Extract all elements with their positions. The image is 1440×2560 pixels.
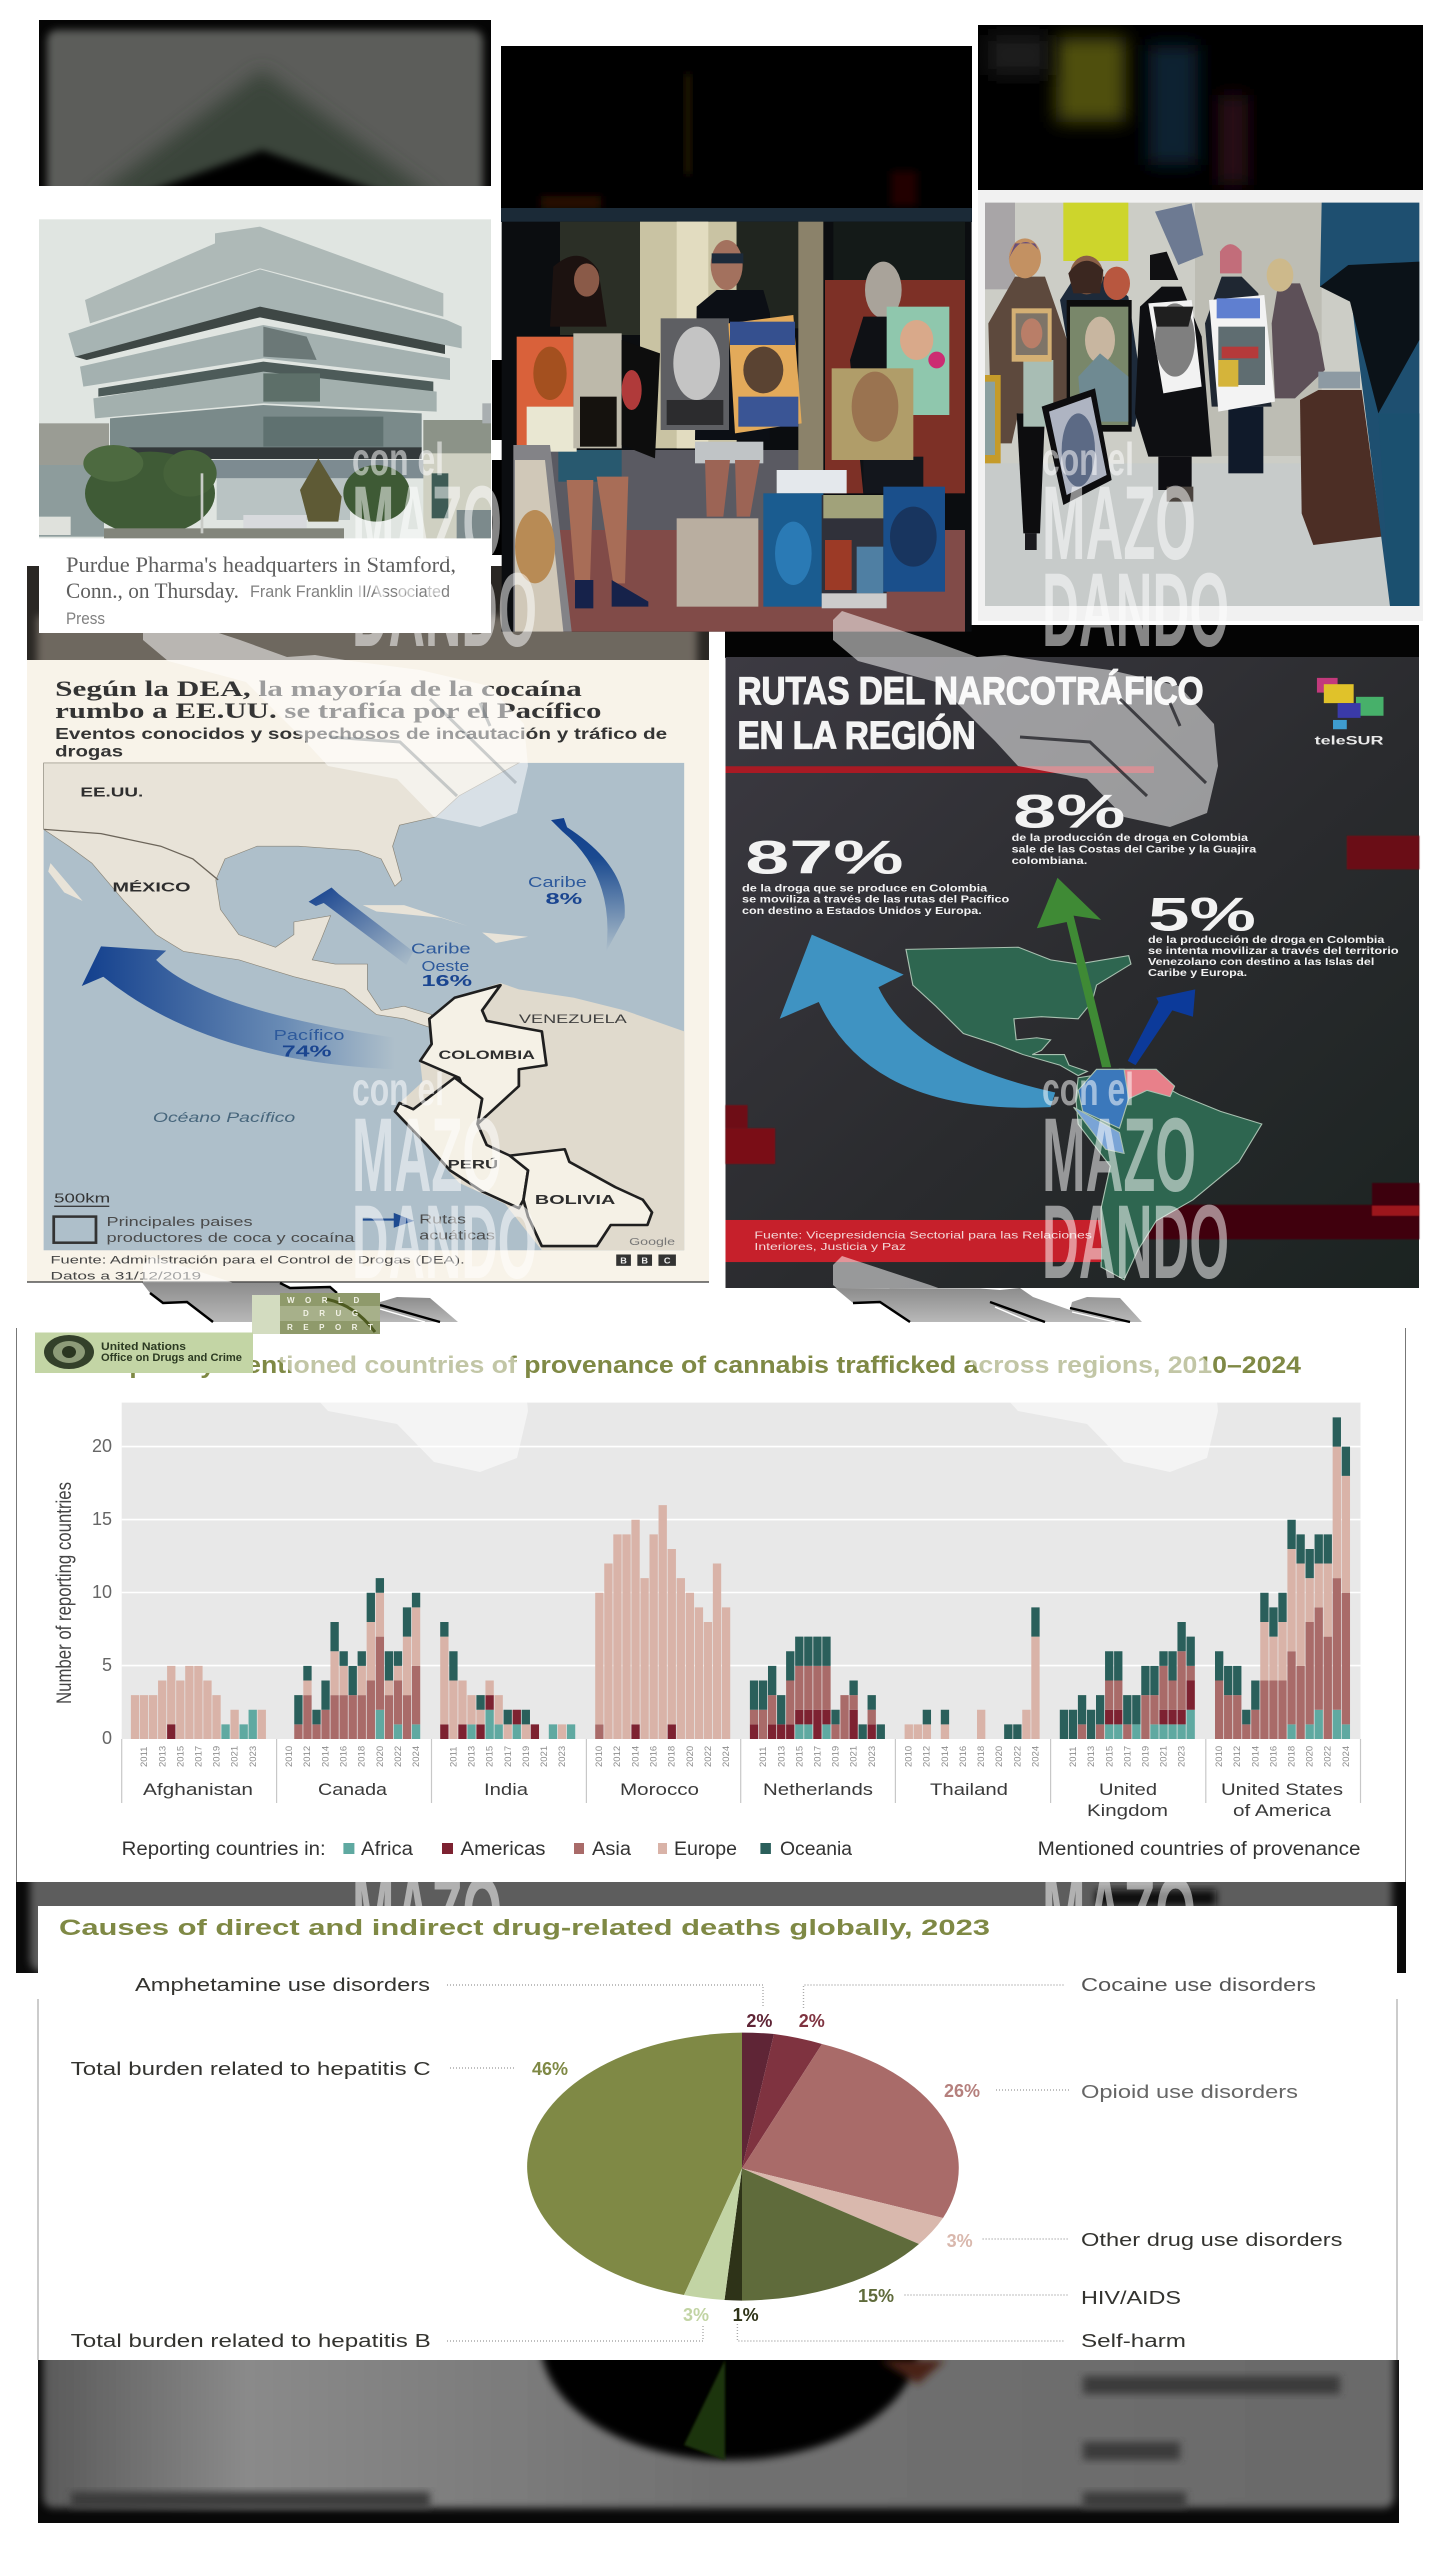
panel: drug-related deaths pie bbox=[16, 1906, 1406, 2360]
legend: Europe bbox=[674, 1839, 737, 1860]
percentage labels: 15% bbox=[858, 2286, 894, 2306]
building photo bbox=[39, 219, 491, 538]
year tick labels: 2019 bbox=[1141, 1746, 1152, 1767]
watermark: con el MAZO DANDO, right column: MAZO bbox=[1042, 465, 1196, 582]
year tick labels: 2017 bbox=[1122, 1746, 1133, 1767]
year tick labels bbox=[139, 1746, 1352, 1767]
scale and legend: 500km bbox=[54, 1191, 110, 1206]
banner: UNODC logo bbox=[35, 1332, 253, 1373]
year tick labels: 2013 bbox=[776, 1746, 787, 1767]
bars: India bbox=[440, 1622, 575, 1739]
legend: Reporting countries in: bbox=[122, 1839, 326, 1860]
year tick labels: 2015 bbox=[485, 1746, 496, 1767]
producing countries bbox=[395, 985, 652, 1246]
category labels: Self-harm bbox=[1081, 2331, 1186, 2351]
title: RUTAS DEL NARCOTRÁFICO bbox=[737, 669, 1204, 713]
ground posters bbox=[513, 445, 572, 632]
year tick labels: 2022 bbox=[393, 1746, 404, 1767]
legend bbox=[122, 1839, 1361, 1860]
watermark: con el MAZO DANDO, right column: con el bbox=[1042, 433, 1134, 485]
panel: blurred header above vigil photo bbox=[978, 25, 1423, 190]
map and labels: acuáticas bbox=[419, 1228, 496, 1243]
person right bbox=[865, 262, 902, 318]
chart title: Frequently mentioned countries of provenance of cannabis trafficked across regions, 2010–2024 bbox=[79, 1352, 1302, 1379]
sea bbox=[44, 763, 684, 1250]
y axis labels: 20 bbox=[92, 1436, 112, 1456]
y axis labels: 5 bbox=[102, 1655, 112, 1675]
hand fragments visible in the gap above the chart bbox=[142, 1282, 1142, 1322]
banner: World Drug Report: REPORT bbox=[287, 1323, 383, 1332]
watermark: con el MAZO DANDO, left column: con el bbox=[352, 433, 444, 485]
map labels: MÉXICO bbox=[112, 880, 191, 894]
band: black strip above narcotrafficking routes panel bbox=[725, 625, 1419, 658]
arrow: Caribbean 8% bbox=[1037, 878, 1111, 1067]
year tick labels: 2016 bbox=[339, 1746, 350, 1767]
band: dark strip between chart and pie bbox=[16, 1882, 1406, 1973]
legend: Africa bbox=[361, 1839, 413, 1860]
map title: Según la DEA, la mayoría de la cocaína bbox=[55, 677, 583, 701]
BBC logo: B bbox=[641, 1256, 648, 1265]
person left bbox=[550, 256, 607, 327]
stat: 5%: 5% bbox=[1148, 888, 1256, 941]
map and labels: Google bbox=[629, 1237, 675, 1248]
photo caption: Conn., on Thursday. bbox=[66, 578, 239, 603]
year tick labels: 2024 bbox=[1341, 1746, 1352, 1767]
year tick labels: 2010 bbox=[594, 1746, 605, 1767]
country labels: United States bbox=[1221, 1780, 1343, 1799]
photo caption: Press bbox=[66, 609, 105, 628]
panel: blurred header above protest photo bbox=[501, 46, 972, 208]
year tick labels: 2010 bbox=[1214, 1746, 1225, 1767]
panel: cannabis provenance chart bbox=[16, 1328, 1406, 1882]
stat: 8%: 8% bbox=[1013, 785, 1125, 838]
stat: 8%: colombiana. bbox=[1012, 855, 1087, 867]
banner: World Drug Report bbox=[252, 1293, 383, 1334]
stat: 87%: se moviliza a través de las rutas del Pacífico bbox=[742, 894, 1010, 905]
map and labels bbox=[44, 677, 684, 1283]
category labels: Other drug use disorders bbox=[1081, 2230, 1342, 2250]
pie chart bbox=[527, 2033, 959, 2301]
legend: Americas bbox=[460, 1839, 546, 1860]
posters held bbox=[517, 337, 573, 450]
year tick labels: 2015 bbox=[794, 1746, 805, 1767]
bars: Morocco bbox=[595, 1505, 730, 1739]
source line: Fuente: Administración para el Control de Drogas (DEA). bbox=[51, 1253, 465, 1267]
year tick labels: 2012 bbox=[1232, 1746, 1243, 1767]
map title: drogas bbox=[55, 742, 123, 760]
stat: 8%: sale de las Costas del Caribe y la Guajira bbox=[1012, 844, 1256, 855]
stat: 8%: de la producción de droga en Colombia bbox=[1012, 833, 1248, 844]
year tick labels: 2023 bbox=[867, 1746, 878, 1767]
text: DANDO bbox=[1042, 552, 1229, 669]
stat: 5% bbox=[1148, 888, 1399, 979]
year tick labels: 2016 bbox=[649, 1746, 660, 1767]
year tick labels: 2023 bbox=[557, 1746, 568, 1767]
watermark: con el MAZO DANDO, right column: con el bbox=[1042, 1063, 1134, 1115]
year tick labels: 2011 bbox=[758, 1747, 769, 1767]
year tick labels: 2011 bbox=[449, 1747, 460, 1767]
category labels: HIV/AIDS bbox=[1081, 2288, 1181, 2308]
text: DANDO bbox=[352, 1184, 537, 1301]
stat: 87%: con destino a Estados Unidos y Europa. bbox=[742, 905, 982, 917]
country labels bbox=[143, 1780, 1343, 1820]
plot background bbox=[122, 1403, 1361, 1739]
panel: protest photo with posters bbox=[501, 208, 972, 632]
source bar: Fuente: Vicepresidencia Sectorial para las Relaciones bbox=[754, 1230, 1092, 1241]
stat: 87%: de la droga que se produce en Colombia bbox=[742, 883, 987, 894]
category labels: Opioid use disorders bbox=[1081, 2082, 1298, 2102]
banner: UNODC logo: United Nations bbox=[101, 1341, 186, 1353]
watermark hand: over maps, left bbox=[143, 611, 528, 827]
land: north and central America bbox=[44, 763, 519, 1027]
country labels: Kingdom bbox=[1087, 1801, 1168, 1820]
map and labels: Caribe bbox=[411, 941, 471, 957]
watermark: con el MAZO DANDO, left column: con el bbox=[352, 1063, 444, 1115]
year tick labels: 2018 bbox=[1286, 1746, 1298, 1767]
year tick labels: 2018 bbox=[357, 1746, 368, 1767]
year tick labels: 2020 bbox=[375, 1746, 386, 1767]
country labels: Afghanistan bbox=[143, 1780, 253, 1799]
year tick labels: 2011 bbox=[139, 1747, 150, 1767]
country labels: Thailand bbox=[930, 1780, 1008, 1799]
group separators bbox=[122, 1739, 1361, 1803]
photo caption: Frank Franklin II/Associated bbox=[250, 582, 450, 601]
year tick labels: 2018 bbox=[667, 1746, 678, 1767]
percentage labels: 3% bbox=[683, 2305, 709, 2325]
panel: vigil photo with portraits bbox=[978, 190, 1423, 621]
year tick labels: 2016 bbox=[958, 1746, 969, 1767]
map title: Eventos conocidos y sospechosos de incautación y tráfico de bbox=[55, 725, 667, 743]
bars: United States of America bbox=[1215, 1417, 1350, 1739]
map: Americas bbox=[906, 947, 1262, 1280]
map and labels: Oeste bbox=[422, 959, 469, 975]
title: EN LA REGIÓN bbox=[737, 713, 976, 757]
year tick labels: 2023 bbox=[248, 1746, 259, 1767]
map labels bbox=[80, 785, 616, 1207]
year tick labels: 2021 bbox=[849, 1746, 860, 1767]
watermark: con el MAZO DANDO, right column: MAZO bbox=[1042, 1097, 1196, 1214]
year tick labels: 2021 bbox=[539, 1746, 550, 1767]
legend: Mentioned countries of provenance bbox=[1038, 1839, 1360, 1860]
arrow: Pacific 87% bbox=[780, 935, 1055, 1108]
banner: World Drug Report: WORLD bbox=[287, 1296, 370, 1305]
BBC logo bbox=[616, 1254, 676, 1266]
foreground case and coat bbox=[1300, 390, 1382, 545]
map and labels: 16% bbox=[422, 972, 472, 990]
person center bbox=[711, 240, 743, 290]
percentage labels: 2% bbox=[799, 2011, 825, 2031]
banner: UNODC logo: Office on Drugs and Crime bbox=[101, 1352, 242, 1364]
country labels: India bbox=[484, 1780, 529, 1799]
country labels: Morocco bbox=[620, 1780, 699, 1799]
year tick labels: 2022 bbox=[1323, 1746, 1334, 1767]
mourners bbox=[985, 203, 1419, 606]
watermark: con el MAZO DANDO, left column: MAZO bbox=[352, 465, 502, 582]
year tick labels: 2017 bbox=[503, 1746, 514, 1767]
watermark: con el MAZO DANDO, left column: MAZO bbox=[352, 1856, 502, 1973]
bars: Afghanistan bbox=[131, 1666, 266, 1739]
arrow: Pacific route bbox=[82, 946, 395, 1069]
protesters bbox=[502, 222, 972, 632]
pie title: Causes of direct and indirect drug-related deaths globally, 2023 bbox=[59, 1915, 990, 1940]
year tick labels: 2012 bbox=[612, 1746, 623, 1767]
year tick labels: 2013 bbox=[157, 1746, 168, 1767]
country labels: Netherlands bbox=[763, 1780, 873, 1799]
year tick labels: 2020 bbox=[1305, 1746, 1316, 1767]
map and labels: productores de coca y cocaína bbox=[107, 1230, 355, 1245]
year tick labels: 2019 bbox=[831, 1746, 842, 1767]
banner: World Drug Report: DRUG bbox=[303, 1309, 369, 1318]
year tick labels: 2010 bbox=[284, 1746, 295, 1767]
figures bbox=[988, 277, 1075, 443]
hand creases: right, dark bbox=[1020, 699, 1206, 796]
bars: Canada bbox=[294, 1578, 420, 1739]
band: blurred copy of the pie under the pie panel bbox=[38, 2360, 1399, 2523]
stat: 8% bbox=[1012, 785, 1256, 867]
map and labels: 8% bbox=[546, 890, 582, 908]
title bbox=[737, 669, 1204, 757]
panel: teleSUR narcotrafficking routes bbox=[726, 657, 1419, 1288]
percentage labels: 46% bbox=[532, 2059, 568, 2079]
decorative red blocks bbox=[726, 836, 1419, 1239]
country labels: Canada bbox=[318, 1780, 388, 1799]
year tick labels: 2016 bbox=[1268, 1746, 1279, 1767]
percentage labels bbox=[532, 2011, 980, 2325]
percentage labels: 1% bbox=[733, 2305, 759, 2325]
bars: United Kingdom bbox=[1060, 1622, 1195, 1739]
stat: 5%: de la producción de droga en Colombia bbox=[1148, 934, 1385, 946]
portrait frames bbox=[1012, 308, 1052, 362]
y axis labels: 10 bbox=[92, 1582, 112, 1602]
arrow: Venezuela 5% bbox=[1128, 989, 1195, 1065]
map and labels: Principales paises bbox=[107, 1214, 253, 1229]
year tick labels: 2014 bbox=[631, 1746, 642, 1767]
watermark: con el MAZO DANDO, right column bbox=[1042, 433, 1229, 1973]
map and labels: 74% bbox=[282, 1042, 332, 1060]
map labels: COLOMBIA bbox=[439, 1049, 535, 1062]
watermark: con el MAZO DANDO, left column bbox=[352, 433, 537, 1973]
map and labels: VENEZUELA bbox=[519, 1012, 628, 1026]
map and labels: Océano Pacífico bbox=[153, 1109, 295, 1125]
map and labels: Pacífico bbox=[274, 1027, 345, 1044]
stat: 5%: se intenta movilizar a través del territorio bbox=[1148, 945, 1399, 957]
source bar bbox=[726, 1220, 1101, 1262]
watermark hand: over chart, right bbox=[833, 1256, 1218, 1472]
map title bbox=[55, 677, 667, 760]
year tick labels: 2014 bbox=[1250, 1746, 1261, 1767]
photo caption bbox=[66, 552, 456, 628]
year tick labels: 2023 bbox=[1177, 1746, 1188, 1767]
panel: blurred header above headquarters photo bbox=[39, 20, 491, 186]
year tick labels: 2015 bbox=[1104, 1746, 1115, 1767]
text: DANDO bbox=[352, 552, 537, 669]
year tick labels: 2011 bbox=[1068, 1747, 1079, 1767]
year tick labels: 2017 bbox=[813, 1746, 824, 1767]
y axis labels bbox=[92, 1436, 112, 1748]
stat: 5%: Venezolano con destino a las Islas del bbox=[1148, 956, 1374, 968]
y axis labels: 15 bbox=[92, 1509, 112, 1529]
y axis title: Number of reporting countries bbox=[53, 1482, 76, 1704]
watermark hand: over chart, left bbox=[143, 1256, 528, 1472]
bars: Thailand bbox=[905, 1607, 1040, 1739]
category labels: Total burden related to hepatitis B bbox=[71, 2331, 431, 2351]
map labels: BOLIVIA bbox=[535, 1193, 616, 1207]
hand creases: left, faint bbox=[330, 699, 516, 796]
year tick labels: 2010 bbox=[904, 1746, 915, 1767]
country labels: United bbox=[1099, 1780, 1157, 1799]
watermark hand: over maps, right bbox=[833, 611, 1218, 827]
year tick labels: 2024 bbox=[411, 1746, 422, 1767]
watermark: con el MAZO DANDO, right column: MAZO bbox=[1042, 1856, 1196, 1973]
year tick labels: 2015 bbox=[175, 1746, 186, 1767]
year tick labels: 2013 bbox=[467, 1746, 478, 1767]
stat: 5%: Caribe y Europa. bbox=[1148, 967, 1247, 979]
percentage labels: 2% bbox=[746, 2011, 772, 2031]
BBC logo: C bbox=[664, 1256, 671, 1265]
year tick labels: 2018 bbox=[976, 1746, 987, 1767]
category labels: Amphetamine use disorders bbox=[135, 1975, 430, 1995]
stat: 87%: 87% bbox=[745, 832, 904, 884]
map and labels: Rutas bbox=[419, 1212, 467, 1226]
legend: Oceania bbox=[780, 1839, 852, 1860]
teleSUR logo: teleSUR bbox=[1315, 734, 1384, 747]
bars: Netherlands bbox=[750, 1637, 885, 1739]
photo caption: Purdue Pharma's headquarters in Stamford, bbox=[66, 552, 456, 577]
teleSUR logo bbox=[1315, 678, 1384, 747]
year tick labels: 2024 bbox=[1030, 1746, 1041, 1767]
map and labels: Datos a 31/12/2019 bbox=[51, 1269, 202, 1283]
land: South America bbox=[399, 983, 684, 1250]
year tick labels: 2020 bbox=[994, 1746, 1005, 1767]
year tick labels: 2019 bbox=[521, 1746, 532, 1767]
map and labels: Caribe bbox=[528, 875, 587, 891]
panel: DEA cocaine routes map (BBC) bbox=[27, 660, 709, 1283]
category labels: Cocaine use disorders bbox=[1081, 1975, 1316, 1995]
legend: Asia bbox=[592, 1839, 631, 1860]
year tick labels: 2019 bbox=[212, 1746, 223, 1767]
year tick labels: 2021 bbox=[230, 1746, 241, 1767]
panel: Purdue Pharma headquarters photo bbox=[39, 186, 491, 633]
country labels: of America bbox=[1233, 1801, 1332, 1820]
year tick labels: 2024 bbox=[721, 1746, 732, 1767]
category labels: Total burden related to hepatitis C bbox=[71, 2059, 431, 2079]
year tick labels: 2012 bbox=[922, 1746, 933, 1767]
text: DANDO bbox=[1042, 1184, 1229, 1301]
BBC logo: B bbox=[620, 1256, 627, 1265]
year tick labels: 2020 bbox=[685, 1746, 696, 1767]
source bar: Interiores, Justicia y Paz bbox=[754, 1241, 906, 1253]
stray edges between photos bbox=[492, 360, 504, 555]
year tick labels: 2021 bbox=[1159, 1746, 1170, 1767]
stat: 87% bbox=[742, 832, 1010, 917]
year tick labels: 2017 bbox=[193, 1746, 204, 1767]
watermark: con el MAZO DANDO, left column: MAZO bbox=[352, 1097, 502, 1214]
year tick labels: 2012 bbox=[302, 1746, 313, 1767]
category labels bbox=[71, 1975, 1343, 2351]
arrow: West Caribbean route bbox=[309, 887, 413, 965]
band: dark blurred strip above map bbox=[27, 566, 709, 660]
y axis labels: 0 bbox=[102, 1728, 112, 1748]
percentage labels: 26% bbox=[944, 2081, 980, 2101]
year tick labels: 2014 bbox=[321, 1746, 332, 1767]
year tick labels: 2013 bbox=[1086, 1746, 1097, 1767]
map labels: PERÚ bbox=[448, 1157, 498, 1171]
arrow: Caribbean route bbox=[551, 818, 625, 951]
map labels: EE.UU. bbox=[80, 785, 143, 799]
year tick labels: 2022 bbox=[1012, 1746, 1023, 1767]
map title: rumbo a EE.UU. se trafica por el Pacífico bbox=[55, 699, 602, 723]
year tick labels: 2022 bbox=[703, 1746, 714, 1767]
year tick labels: 2014 bbox=[940, 1746, 951, 1767]
percentage labels: 3% bbox=[947, 2231, 973, 2251]
leader lines bbox=[447, 1985, 1070, 2341]
